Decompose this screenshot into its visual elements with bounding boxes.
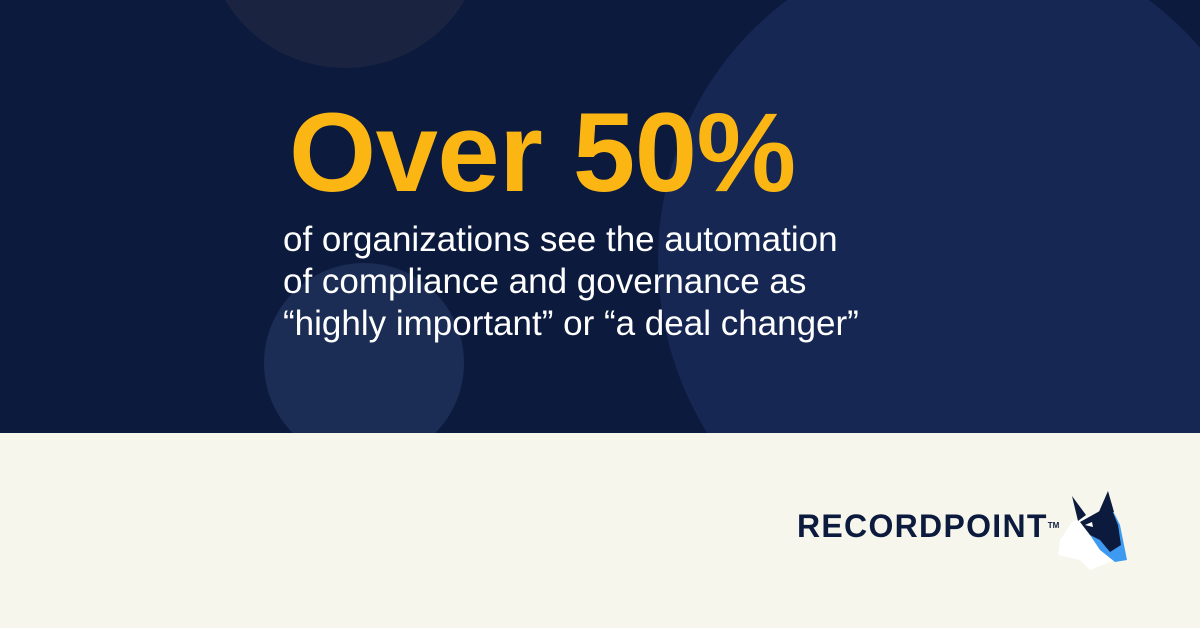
headline: Over 50% bbox=[289, 90, 796, 215]
logo text: RECORDPOINTTM bbox=[797, 508, 1059, 544]
text block: description: of compliance and governance as bbox=[283, 262, 806, 301]
text block: description bbox=[283, 220, 859, 343]
text block: description: “highly important” or “a deal changer” bbox=[283, 304, 859, 343]
logo: recordpoint bbox=[797, 491, 1127, 570]
icon: dog head bbox=[1058, 491, 1127, 570]
text block: description: of organizations see the automation bbox=[283, 220, 838, 259]
panel: dark header bbox=[0, 0, 1200, 433]
